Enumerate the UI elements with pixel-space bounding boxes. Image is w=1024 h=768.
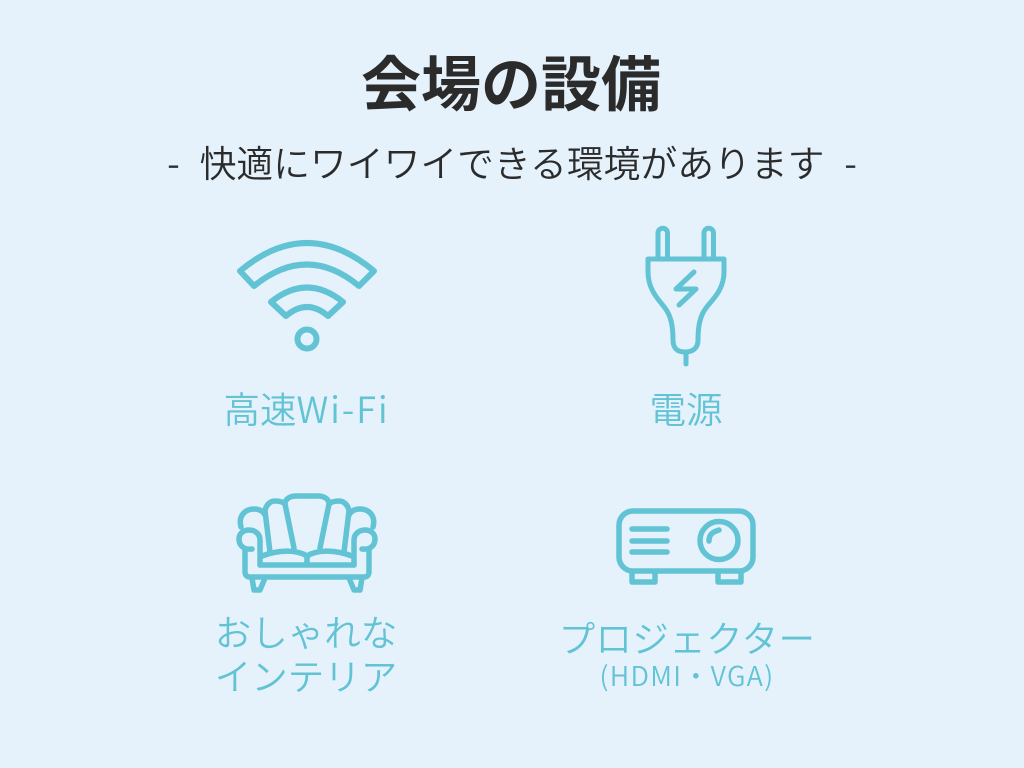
label: interior bbox=[215, 604, 397, 701]
label: power: 電源 bbox=[650, 381, 722, 434]
subtitle: - 快適にワイワイできる環境があります - bbox=[167, 134, 857, 188]
label: interior: インテリア bbox=[215, 648, 397, 701]
label: projector: プロジェクター bbox=[559, 610, 815, 663]
label: wifi: 高速Wi-Fi bbox=[224, 381, 389, 434]
title: 会場の設備 bbox=[361, 37, 661, 124]
label: projector ports: (HDMI・VGA) bbox=[600, 655, 774, 694]
label: interior: おしゃれな bbox=[215, 604, 397, 657]
